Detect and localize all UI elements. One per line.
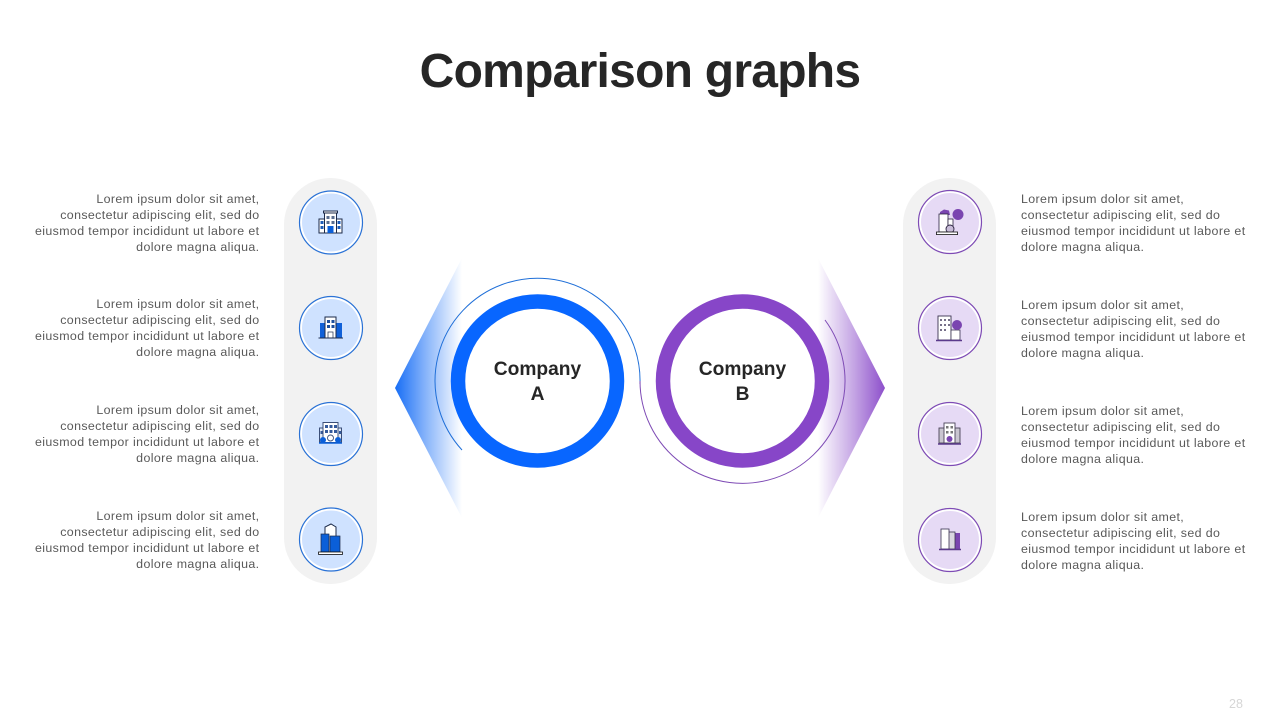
icon badge: right 4 towers	[918, 508, 982, 572]
text block: left 2: Lorem ipsum dolor sit amet,	[96, 297, 260, 311]
text block: left 2: consectetur adipiscing elit, sed do	[60, 313, 260, 327]
text block: left 3: dolore magna aliqua.	[136, 451, 260, 465]
text block: right 2: eiusmod tempor incididunt ut labore et	[1021, 330, 1246, 344]
icon badge: right 2 building dollar	[918, 296, 982, 360]
icon badge: left 4 towers	[300, 508, 362, 571]
icon badge: left 3 office	[300, 402, 362, 466]
text block: right 4	[1021, 510, 1246, 572]
text block: left 4: consectetur adipiscing elit, sed do	[60, 524, 260, 538]
text block: left 1: eiusmod tempor incididunt ut labore et	[35, 224, 260, 238]
text block: right 2: dolore magna aliqua.	[1021, 346, 1144, 360]
text block: right 2	[1021, 298, 1246, 360]
text block: left 3: Lorem ipsum dolor sit amet,	[96, 403, 260, 417]
arrow: company B gradient	[818, 258, 885, 518]
text block: right 1: eiusmod tempor incididunt ut labore et	[1021, 224, 1246, 238]
thin arc: company A	[435, 278, 640, 450]
text block: left 4: eiusmod tempor incididunt ut labore et	[35, 540, 260, 554]
label: company B: Company	[699, 359, 787, 380]
text block: left 1: dolore magna aliqua.	[136, 240, 260, 254]
thin arc: company B	[640, 320, 845, 483]
text block: left 2: eiusmod tempor incididunt ut labore et	[35, 329, 260, 343]
text block: right 4: dolore magna aliqua.	[1021, 558, 1144, 572]
panel: right pill	[903, 178, 996, 584]
text block: right 4: Lorem ipsum dolor sit amet,	[1021, 510, 1184, 524]
text block: right 1: consectetur adipiscing elit, sed do	[1021, 208, 1220, 222]
text block: right 3: Lorem ipsum dolor sit amet,	[1021, 404, 1184, 418]
text block: left 2	[35, 297, 260, 359]
text block: left 3: eiusmod tempor incididunt ut labore et	[35, 435, 260, 449]
text block: left 4	[35, 508, 260, 570]
icon badge: left 2 office	[300, 296, 362, 360]
text block: left 4: dolore magna aliqua.	[136, 556, 260, 570]
text block: right 3: dolore magna aliqua.	[1021, 452, 1144, 466]
text block: right 1: Lorem ipsum dolor sit amet,	[1021, 192, 1184, 206]
panel: left pill	[284, 178, 377, 584]
text block: left 3	[35, 403, 260, 465]
text block: right 3	[1021, 404, 1246, 466]
text block: left 3: consectetur adipiscing elit, sed do	[60, 419, 260, 433]
text block: left 4: Lorem ipsum dolor sit amet,	[96, 508, 260, 522]
page number: 28	[1229, 697, 1243, 711]
ring: company A: A	[531, 384, 545, 405]
ring: company A	[458, 302, 617, 460]
ring: company B	[663, 302, 822, 460]
text block: right 2: consectetur adipiscing elit, sed do	[1021, 314, 1220, 328]
icon badge: right 3 school	[918, 402, 982, 466]
text block: left 2: dolore magna aliqua.	[136, 345, 260, 359]
arrow: company A gradient	[395, 258, 462, 518]
text block: right 1: dolore magna aliqua.	[1021, 240, 1144, 254]
icon badge: left 1 office	[300, 191, 362, 254]
text block: right 3: consectetur adipiscing elit, sed do	[1021, 420, 1220, 434]
text block: right 1	[1021, 192, 1246, 254]
text block: right 4: consectetur adipiscing elit, sed do	[1021, 526, 1220, 540]
ring: company B: B	[736, 384, 749, 405]
label: company A: Company	[494, 359, 582, 380]
title: Comparison graphs	[420, 45, 860, 98]
text block: left 1: Lorem ipsum dolor sit amet,	[96, 192, 260, 206]
text block: right 3: eiusmod tempor incididunt ut labore et	[1021, 436, 1246, 450]
text block: left 1: consectetur adipiscing elit, sed do	[60, 208, 260, 222]
text block: left 1	[35, 192, 260, 254]
text block: right 2: Lorem ipsum dolor sit amet,	[1021, 298, 1184, 312]
icon badge: right 1 factory clock	[918, 190, 982, 254]
text block: right 4: eiusmod tempor incididunt ut labore et	[1021, 542, 1246, 556]
